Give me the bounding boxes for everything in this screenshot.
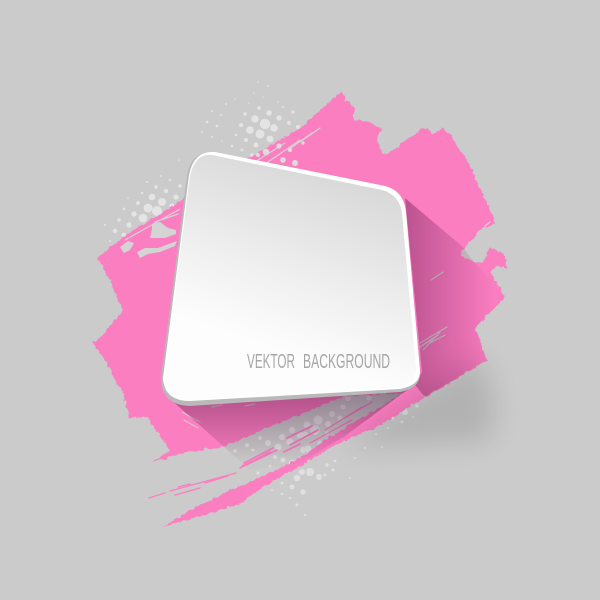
card face <box>164 155 416 400</box>
long shadow: blurred on background <box>340 355 495 445</box>
halftone dots: top and left clusters <box>104 81 300 242</box>
long shadow: below card <box>168 385 415 470</box>
long shadow: right of card <box>405 198 505 397</box>
halftone dots: over upper brush <box>256 141 305 166</box>
halftone dots: bottom cluster <box>233 395 419 516</box>
pink brush tail: thin strokes <box>149 402 372 498</box>
card white rim <box>163 152 420 401</box>
card caption: second word: BACKGROUND <box>303 350 390 373</box>
gray scratches in brush <box>120 128 490 428</box>
card caption: first word: VEKTOR <box>247 350 295 373</box>
pink brush stroke: main <box>93 91 508 527</box>
card: white paper panel <box>161 152 420 406</box>
card edge <box>161 152 420 406</box>
